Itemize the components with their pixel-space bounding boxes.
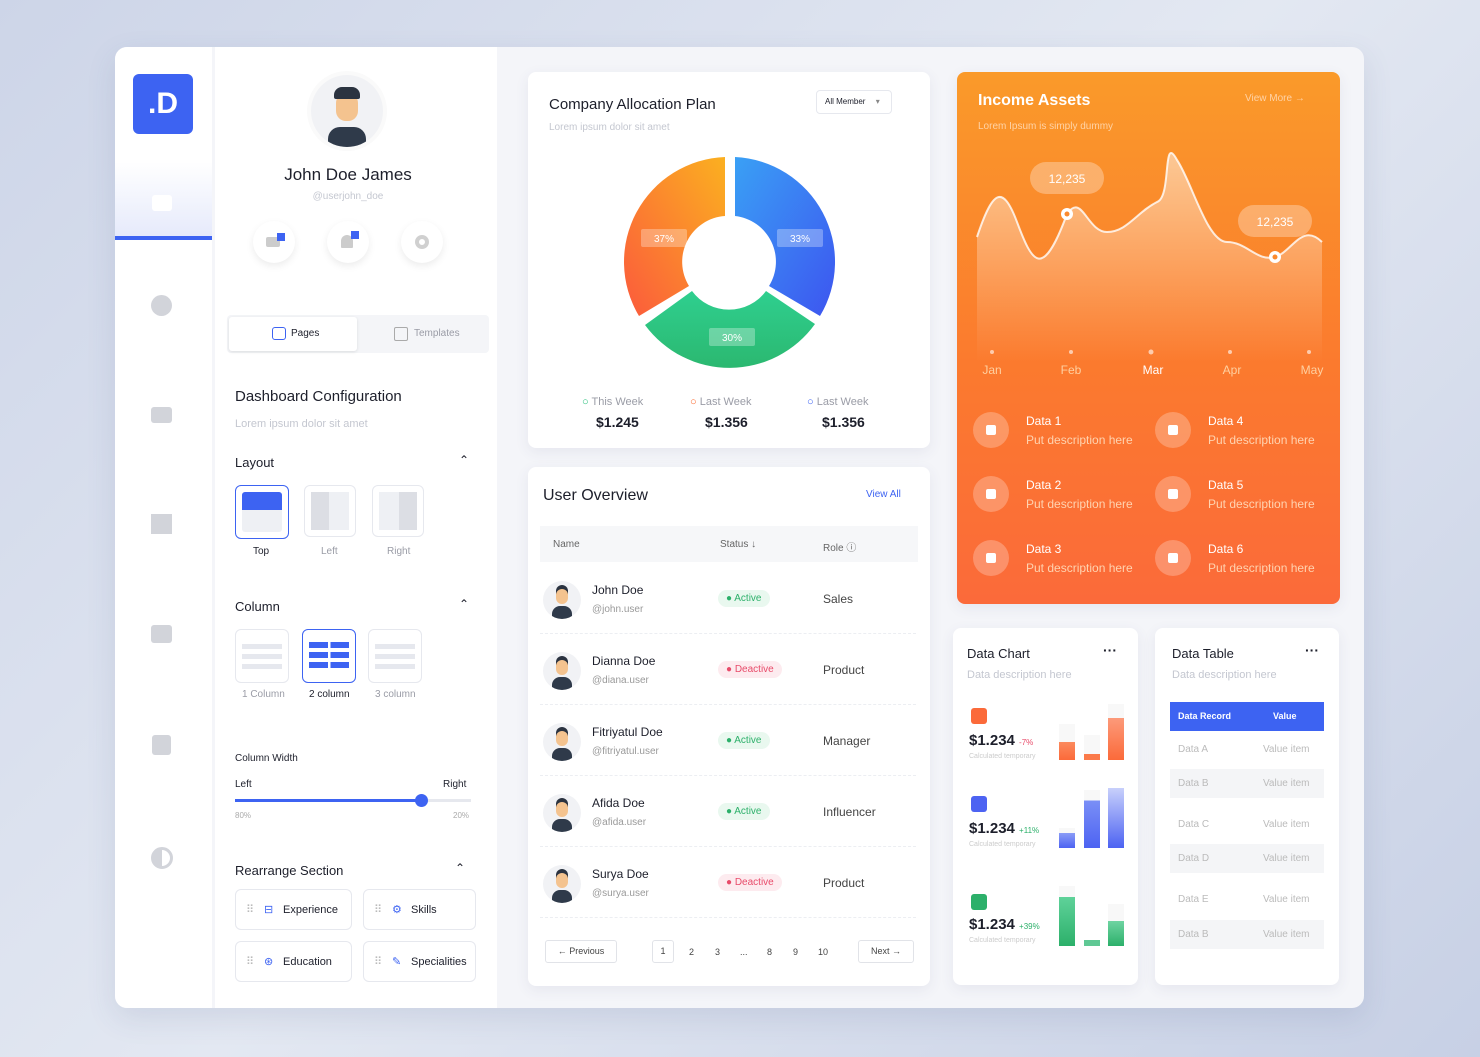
- text: ● Active: [726, 735, 762, 746]
- rearrange section: Rearrange Section: [235, 863, 343, 878]
- data items: Data 1: [1026, 414, 1061, 428]
- rearrange section: Education: [283, 956, 332, 968]
- legend values: $1.356: [822, 414, 865, 430]
- panel: data table: Value item: [1263, 778, 1310, 789]
- donut chart: 33%: [790, 234, 810, 245]
- text: Product: [823, 876, 864, 890]
- text: Fitriyatul Doe: [592, 725, 663, 739]
- data items: Put description here: [1208, 433, 1315, 447]
- rearrange section: ✎: [392, 956, 401, 968]
- text: View All: [866, 489, 901, 500]
- panel: data table: ···: [1305, 642, 1319, 658]
- column width slider: Right: [443, 779, 466, 790]
- text: Product: [823, 663, 864, 677]
- table header: Role ⓘ: [823, 543, 856, 554]
- metric blue: $1.234 +11%: [969, 820, 1039, 837]
- column width slider: 80%: [235, 811, 251, 820]
- column width slider: Column Width: [235, 753, 298, 764]
- text: ● Deactive: [726, 664, 774, 675]
- area chart: [976, 152, 1324, 377]
- profile/config panel: [215, 47, 497, 1008]
- data items: Put description here: [1208, 497, 1315, 511]
- legend values: $1.245: [596, 414, 639, 430]
- panel: data table: Data D: [1178, 853, 1209, 864]
- tabs pages/templates: Pages: [291, 328, 319, 339]
- text: @surya.user: [592, 888, 649, 899]
- metric green: [969, 894, 1124, 946]
- column section: 1 Column: [242, 689, 285, 700]
- panel: income assets: Income Assets: [978, 92, 1090, 109]
- data items: Data 2: [1026, 478, 1061, 492]
- pagination: ← Previous: [558, 946, 604, 956]
- area chart: 12,235: [1049, 172, 1086, 186]
- layout section: [235, 453, 469, 557]
- data items: Put description here: [1208, 561, 1315, 575]
- panel: data table: Data B: [1178, 929, 1209, 940]
- area chart: Mar: [1143, 363, 1163, 377]
- text: Afida Doe: [592, 796, 645, 810]
- column width slider: [235, 753, 471, 820]
- rearrange section: ⠿: [374, 904, 382, 916]
- table header: Name: [553, 539, 580, 550]
- panel: company allocation plan: [528, 72, 930, 448]
- table header: [540, 526, 918, 562]
- panel: data table: Value item: [1263, 744, 1310, 755]
- area chart: Feb: [1061, 363, 1082, 377]
- layout section: ⌃: [459, 453, 469, 467]
- data items: Data 6: [1208, 542, 1243, 556]
- text: @afida.user: [592, 817, 646, 828]
- data items: [973, 412, 1315, 576]
- metric orange: [969, 708, 1124, 760]
- legend values: [582, 396, 868, 430]
- panel: data table: Data Table: [1172, 646, 1234, 661]
- layout section: Top: [253, 546, 269, 557]
- rearrange section: ⠿: [374, 956, 382, 968]
- text: ● Active: [726, 806, 762, 817]
- profile/config panel: @userjohn_doe: [313, 191, 383, 202]
- data items: Data 4: [1208, 414, 1243, 428]
- text: @diana.user: [592, 675, 649, 686]
- legend values: ○ Last Week: [807, 396, 868, 408]
- metric green: $1.234 +39%: [969, 916, 1040, 933]
- area chart: Apr: [1223, 363, 1241, 377]
- rearrange section: ⠿: [246, 904, 254, 916]
- nav home active: [115, 162, 212, 240]
- panel: data table: [1155, 628, 1339, 985]
- panel: income assets: Lorem Ipsum is simply dummy: [978, 121, 1113, 132]
- panel: data table: Value item: [1263, 929, 1310, 940]
- column section: 3 column: [375, 689, 416, 700]
- panel: data table: Value item: [1263, 894, 1310, 905]
- nav icons: [151, 295, 173, 869]
- main dashboard frame: [115, 47, 1364, 1008]
- panel: company allocation plan: All Member ▾: [825, 97, 880, 106]
- rearrange section: Skills: [411, 904, 437, 916]
- panel: data table: Value: [1273, 711, 1297, 721]
- panel: income assets: View More →: [1245, 93, 1305, 104]
- rearrange section: ⊟: [264, 904, 273, 916]
- rearrange section: Experience: [283, 904, 338, 916]
- area chart: Jan: [982, 363, 1002, 377]
- panel: data table: Value item: [1263, 853, 1310, 864]
- text: ● Deactive: [726, 877, 774, 888]
- panel: data table: Data Record: [1178, 711, 1231, 721]
- pagination: ...: [740, 947, 748, 957]
- pagination: 10: [818, 947, 828, 957]
- profile/config panel: Lorem ipsum dolor sit amet: [235, 418, 368, 430]
- pagination: 2: [689, 947, 694, 957]
- panel: data table: Data A: [1178, 744, 1208, 755]
- rearrange section: ⊛: [264, 956, 273, 968]
- metric green: Calculated temporary: [969, 937, 1036, 944]
- rearrange section: [235, 861, 476, 982]
- panel: company allocation plan: Lorem ipsum dolor sit amet: [549, 122, 670, 133]
- text: Sales: [823, 592, 853, 606]
- data items: Put description here: [1026, 433, 1133, 447]
- data items: Data 3: [1026, 542, 1061, 556]
- column section: ⌃: [459, 597, 469, 611]
- panel: data chart: Data description here: [967, 669, 1072, 681]
- area chart: May: [1301, 363, 1323, 377]
- rearrange section: Specialities: [411, 956, 467, 968]
- panel: data chart: ···: [1103, 642, 1117, 658]
- panel: company allocation plan: Company Allocation Plan: [549, 96, 716, 113]
- panel: user overview: [528, 467, 930, 986]
- text: Manager: [823, 734, 870, 748]
- panel: income assets: [957, 72, 1340, 604]
- legend values: $1.356: [705, 414, 748, 430]
- donut chart: 30%: [722, 333, 742, 344]
- tabs pages/templates: [227, 315, 489, 353]
- panel: data table: Data B: [1178, 778, 1209, 789]
- column width slider: 20%: [453, 811, 469, 820]
- rearrange section: ⠿: [246, 956, 254, 968]
- dashboard configuration heading: Dashboard Configuration: [235, 388, 402, 405]
- pagination: 3: [715, 947, 720, 957]
- donut chart: 37%: [654, 234, 674, 245]
- panel: data chart: [953, 628, 1138, 985]
- legend values: ○ This Week: [582, 396, 643, 408]
- metric blue: [969, 788, 1124, 848]
- pagination: Next →: [871, 946, 901, 956]
- area chart: 12,235: [1257, 215, 1294, 229]
- donut chart: [624, 157, 835, 368]
- panel: data table: Data E: [1178, 894, 1209, 905]
- layout section: Left: [321, 546, 338, 557]
- legend values: ○ Last Week: [690, 396, 751, 408]
- text: User Overview: [543, 487, 648, 504]
- metric orange: $1.234 -7%: [969, 732, 1033, 749]
- pagination: 9: [793, 947, 798, 957]
- panel: data chart: Data Chart: [967, 646, 1030, 661]
- tabs pages/templates: Templates: [414, 328, 460, 339]
- action icons: [253, 231, 443, 266]
- user name: John Doe James: [284, 165, 412, 184]
- pagination: 1: [660, 946, 666, 956]
- table header: Status ↓: [720, 539, 756, 550]
- metric orange: Calculated temporary: [969, 753, 1036, 760]
- panel: data table: Value item: [1263, 819, 1310, 830]
- text: John Doe: [592, 583, 643, 597]
- text: Influencer: [823, 805, 876, 819]
- pagination: [545, 940, 914, 963]
- sidebar nav: [115, 47, 212, 1008]
- data items: Put description here: [1026, 497, 1133, 511]
- rearrange section: ⌃: [455, 861, 465, 875]
- logo: .D: [148, 87, 178, 120]
- text: ● Active: [726, 593, 762, 604]
- layout section: Layout: [235, 455, 274, 470]
- text: @fitriyatul.user: [592, 746, 659, 757]
- rearrange section: ⚙: [392, 904, 402, 916]
- avatar: [311, 75, 383, 147]
- panel: data table: Data C: [1178, 819, 1209, 830]
- text: @john.user: [592, 604, 643, 615]
- column width slider: Left: [235, 779, 252, 790]
- text: Surya Doe: [592, 867, 649, 881]
- column section: 2 column: [309, 689, 350, 700]
- user rows: [540, 581, 916, 918]
- column section: Column: [235, 599, 280, 614]
- data items: Data 5: [1208, 478, 1243, 492]
- layout section: Right: [387, 546, 410, 557]
- data items: Put description here: [1026, 561, 1133, 575]
- logo: [133, 74, 193, 134]
- text: Dianna Doe: [592, 654, 655, 668]
- column section: [235, 597, 469, 700]
- panel: data table: Data description here: [1172, 669, 1277, 681]
- pagination: 8: [767, 947, 772, 957]
- metric blue: Calculated temporary: [969, 841, 1036, 848]
